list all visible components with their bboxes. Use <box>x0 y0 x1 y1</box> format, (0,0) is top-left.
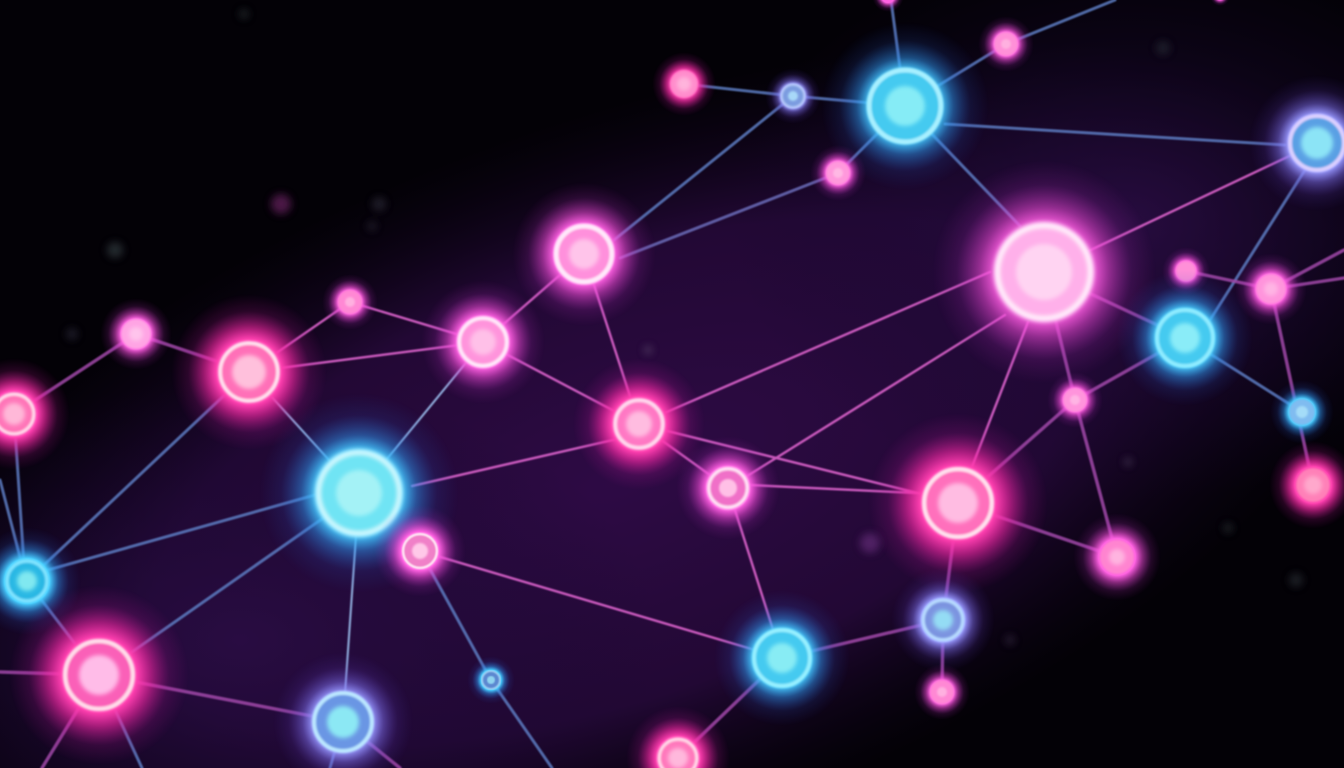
node: top edge pink <box>872 0 1230 12</box>
node: largest pink <box>932 160 1156 384</box>
node: pink white left centre <box>421 280 545 404</box>
node: hot pink bottom edge <box>626 706 730 768</box>
node: pink lower right <box>1073 513 1161 601</box>
node: cyan largest <box>259 393 459 593</box>
node: pink right <box>1235 253 1307 325</box>
node: hot pink left <box>171 294 327 450</box>
node: periwinkle bottom <box>273 652 413 768</box>
node: pink ringed lower <box>374 505 466 597</box>
node: pink small upper left <box>322 274 378 330</box>
node: blue small right <box>1270 380 1334 444</box>
node: pink centre <box>573 358 705 490</box>
node: hot pink large <box>868 413 1048 593</box>
node: cyan large top <box>821 22 989 190</box>
purple links <box>0 250 1344 768</box>
node: cyan right <box>1117 270 1253 406</box>
node: pink small top <box>978 16 1034 72</box>
node: lavender right edge <box>1249 75 1344 211</box>
background dust particles <box>66 9 1303 645</box>
node: pink small <box>652 52 716 116</box>
node: pink ringed <box>676 436 780 540</box>
node: cyan left edge <box>0 527 81 635</box>
node: hot pink lower right <box>1269 441 1344 529</box>
node: hot pink left edge <box>0 358 70 470</box>
node: hot pink lower left <box>9 585 189 765</box>
node: cyan lower centre <box>714 590 850 726</box>
node: pink white <box>512 182 656 326</box>
node: pink small centre top <box>810 145 866 201</box>
node: pink small right centre <box>1047 372 1103 428</box>
node: pink small far left <box>100 298 172 370</box>
node: blue tiny <box>467 656 515 704</box>
node: blue ringed <box>891 568 995 672</box>
pink links <box>249 143 1317 658</box>
pale blue links <box>249 342 483 722</box>
node: pink small right <box>1162 247 1210 295</box>
node: pink small bottom <box>914 664 970 720</box>
node: blue small <box>765 68 821 124</box>
